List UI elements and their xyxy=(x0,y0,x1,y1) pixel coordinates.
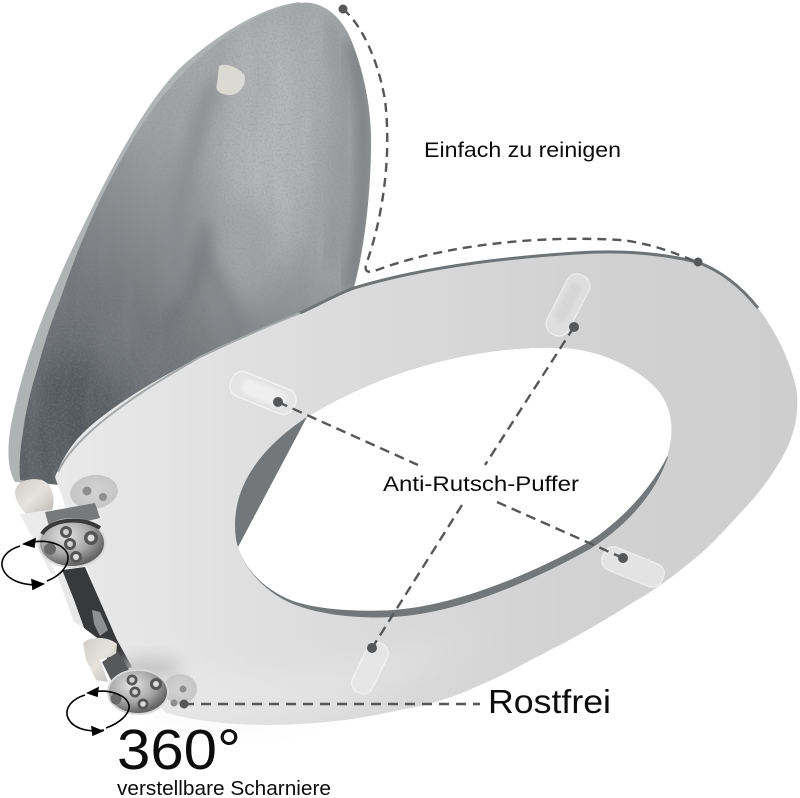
seat with opening xyxy=(55,252,797,725)
dashed callout: easy to clean xyxy=(338,4,702,272)
seat top rim xyxy=(300,252,758,313)
lid side rim xyxy=(8,2,360,485)
bumper top xyxy=(542,270,594,340)
bumper bottom xyxy=(348,639,392,697)
label: rust-free: Rostfrei xyxy=(488,683,611,720)
label: easy to clean: Einfach zu reinigen xyxy=(424,138,621,162)
barrel xyxy=(15,479,54,514)
top hinge xyxy=(15,472,120,578)
dashed callouts: anti-slip bumpers xyxy=(273,322,628,653)
heading: 360 degrees: 360° xyxy=(117,718,241,782)
adjusting disc xyxy=(108,670,168,714)
barrel xyxy=(83,638,117,682)
shadow on seat xyxy=(118,658,182,678)
anti-slip bumpers xyxy=(227,270,667,697)
dashed callout: rust-free xyxy=(180,700,480,708)
lid with stone texture xyxy=(8,2,372,485)
bottom hinge xyxy=(83,638,197,714)
adjusting disc xyxy=(39,519,105,567)
bumper right xyxy=(599,544,667,590)
mounting plate xyxy=(68,472,120,512)
seat opening inner edge xyxy=(235,348,668,617)
lighter lower seat area xyxy=(120,630,480,720)
bumper left xyxy=(227,368,299,418)
peg on lid xyxy=(216,65,245,95)
mounting plate xyxy=(163,674,197,704)
label: anti-slip bumpers: Anti-Rutsch-Puffer xyxy=(383,472,579,496)
rotation arrows bottom hinge xyxy=(67,688,129,735)
rotation arrows top hinge xyxy=(2,539,68,589)
chrome connecting bar xyxy=(57,567,132,674)
seat opening xyxy=(238,348,671,611)
